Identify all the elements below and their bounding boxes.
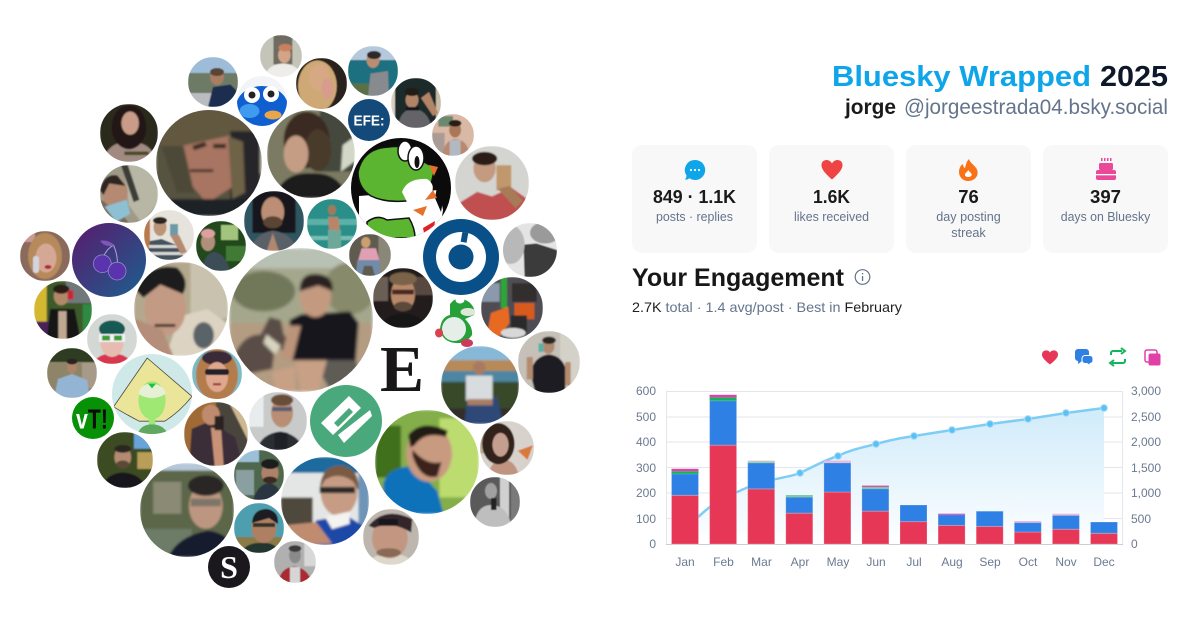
avatar: bald man with beard (244, 191, 304, 251)
bars: September (976, 511, 1003, 544)
month labels: Apr (791, 555, 809, 569)
avatar: man in white shirt (260, 35, 302, 77)
stat label: days on Bluesky (1061, 210, 1151, 224)
right axis labels: 1,500 (1131, 461, 1161, 475)
right axis labels: 500 (1131, 512, 1151, 526)
icon: info (855, 270, 870, 284)
avatar: man in tank top (432, 114, 474, 156)
icon: heart (822, 160, 842, 180)
cumulative area (685, 408, 1104, 544)
avatar: man with curly hair (267, 110, 355, 198)
avatar: Mario kart toy photo (481, 277, 543, 339)
stat value: 1.6K (813, 187, 850, 207)
avatar: man with pink hat in jungle (196, 221, 246, 271)
icon: birthday cake (1096, 158, 1116, 180)
left axis labels: 0 (649, 537, 656, 551)
avatar: cartoon woman with sunglasses (192, 349, 242, 401)
avatar: man in black t-shirt (518, 331, 580, 393)
avatar: EFE logo: EFE: (354, 114, 384, 130)
avatar: man in glasses mirror selfie (144, 210, 194, 260)
avatar: man in black jacket with tree (97, 432, 153, 488)
avatar: Yoshi plush (435, 296, 476, 347)
avatar: man in black t-shirt with greyhound (229, 248, 376, 392)
avatar: Peridot cartoon (112, 354, 192, 434)
left axis labels: 500 (636, 410, 656, 424)
heading: your engagement: Your Engagement (632, 264, 845, 292)
panel: days on Bluesky (1043, 145, 1168, 253)
bars: November (1052, 514, 1079, 544)
right axis labels: 0 (1131, 537, 1138, 551)
stat label: day posting (936, 210, 1001, 224)
bars: December (1090, 522, 1118, 544)
avatar: man in teal water (307, 199, 357, 249)
avatar: canal with bearded man (234, 450, 284, 500)
right axis labels: 1,000 (1131, 486, 1161, 500)
month labels: Mar (751, 555, 772, 569)
avatar: man in fur hat (156, 110, 262, 216)
avatar: woman with long hair (100, 104, 158, 162)
avatar: blue emoji (236, 76, 288, 128)
avatar: man with mirror selfie and blue shirt (281, 457, 369, 545)
engagement summary: 2.7K total · 1.4 avg/post · Best in February (632, 299, 902, 315)
panel: day posting streak (906, 145, 1031, 253)
icon: reposts legend arrows (1110, 348, 1125, 366)
icon: quotes legend squares (1145, 350, 1160, 366)
avatar: cherries (72, 223, 146, 297)
stat value: 849 · 1.1K (653, 187, 736, 207)
left axis labels: 100 (636, 512, 656, 526)
avatar: man by the sea (348, 46, 398, 96)
avatar: woman with curly brown hair (480, 421, 534, 475)
avatar: man in red shirt selfie (455, 146, 529, 220)
avatar: black and white shirtless selfie (470, 477, 520, 527)
stat value: 76 (958, 187, 979, 207)
avatar: man in robe mirror (184, 402, 248, 466)
left axis labels (636, 384, 656, 551)
month labels: Dec (1093, 555, 1115, 569)
month labels: Sep (979, 555, 1001, 569)
right axis labels (1131, 384, 1161, 551)
month labels: May (827, 555, 849, 569)
avatar: blue ring logo (423, 219, 499, 295)
title: Bluesky Wrapped (832, 61, 1091, 93)
avatar: boy with hand on face (134, 262, 228, 356)
chart: monthly engagement bars with cumulative line (636, 384, 1161, 569)
avatar: vT! logo (72, 397, 114, 439)
right axis labels: 3,000 (1131, 384, 1161, 398)
avatar: man with lanyard (249, 392, 307, 450)
avatar: blonde woman on phone (20, 231, 70, 281)
avatar: woman blonde (296, 58, 347, 112)
avatar: man in sunglasses (373, 268, 433, 328)
bars: March (748, 461, 775, 544)
avatar: Slate S logo: S (220, 549, 238, 585)
month labels: Jun (866, 555, 886, 569)
stat label: streak (951, 226, 987, 240)
avatar: black and white close-up (503, 223, 557, 277)
icon: flame (959, 159, 978, 181)
month labels (675, 555, 1115, 569)
avatar: vT! logo: vT! (76, 404, 108, 434)
avatar: El Espanol E logo (364, 331, 440, 407)
bars: January (672, 469, 698, 544)
avatar: man with surgical mask (100, 165, 158, 223)
month labels: Jul (906, 555, 922, 569)
bars: April (786, 495, 813, 544)
avatar: man with green cap and sunglasses (87, 314, 137, 364)
bars: February (710, 395, 737, 544)
avatar: man seated in pink shirt (349, 234, 391, 276)
avatar: man in red flannel (274, 541, 316, 583)
bars: July (900, 505, 927, 544)
avatar: smiling man in blue shirt (375, 410, 479, 514)
panel: avatar bubble cluster (20, 35, 580, 588)
left axis labels: 400 (636, 435, 656, 449)
chart gridlines (666, 391, 1123, 544)
cumulative points (797, 405, 1107, 476)
right axis labels: 2,000 (1131, 435, 1161, 449)
avatar: man with sunglasses on head (363, 509, 419, 565)
avatar: man at lake view (441, 346, 519, 424)
left axis labels: 200 (636, 486, 656, 500)
month labels: Nov (1055, 555, 1077, 569)
month labels: Feb (713, 555, 734, 569)
bars: August (938, 514, 965, 544)
avatar: woman with phone in colorful jacket (34, 281, 92, 339)
stat label: posts · replies (656, 210, 733, 224)
bars: May (824, 461, 851, 544)
panel: likes received (769, 145, 894, 253)
title: 2025 (1100, 61, 1168, 93)
avatar: El Espanol E logo: E (380, 333, 424, 406)
avatar: Yoshi (351, 138, 451, 238)
avatar: man with glasses at mountain lake (140, 463, 234, 557)
left axis labels: 300 (636, 461, 656, 475)
stat label (936, 210, 1001, 240)
user handle: jorge (844, 96, 896, 119)
avatar: man in blue linen shirt (47, 348, 97, 398)
avatar: Slate S logo (208, 546, 250, 588)
icon: speech bubble (685, 160, 705, 180)
bars: October (1014, 521, 1041, 544)
avatar: man with glasses, teal sky (234, 503, 284, 553)
left axis labels: 600 (636, 384, 656, 398)
avatar: man viewing city (188, 57, 238, 107)
cumulative line (685, 408, 1104, 529)
icon: likes legend heart (1042, 350, 1058, 364)
month labels: Jan (675, 555, 695, 569)
month labels: Aug (941, 555, 963, 569)
icon: replies legend bubbles (1075, 349, 1093, 366)
avatar: EFE logo (348, 99, 390, 141)
legend icons (1042, 348, 1160, 366)
panel: posts and replies (632, 145, 757, 253)
month labels: Oct (1019, 555, 1038, 569)
right axis labels: 2,500 (1131, 410, 1161, 424)
stat label: likes received (794, 210, 869, 224)
stat value: 397 (1090, 187, 1121, 207)
avatar: green logo with document mark (310, 385, 382, 457)
user handle: @jorgeestrada04.bsky.social (904, 96, 1168, 119)
avatar: selfie with headphones (391, 78, 441, 128)
bars: June (862, 486, 889, 544)
